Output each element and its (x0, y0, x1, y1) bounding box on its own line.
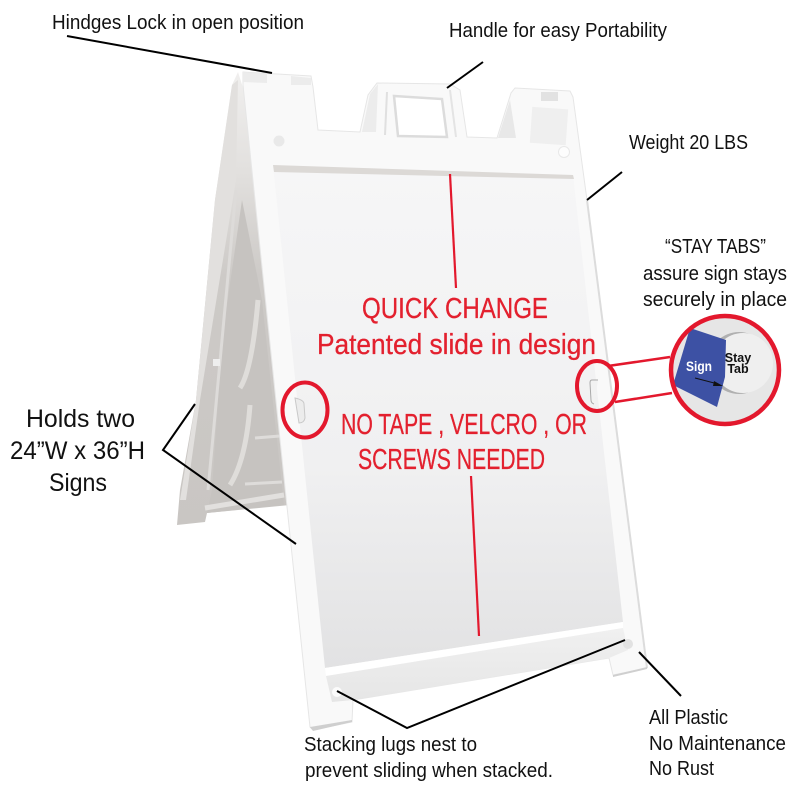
label: stacking lugs: Stacking lugs nest to (304, 734, 477, 756)
ring (671, 316, 779, 424)
label: material: All Plastic (649, 707, 728, 729)
right edge (587, 200, 647, 668)
connector lines to detail (608, 357, 672, 402)
label: weight: Weight 20 LBS (629, 132, 748, 154)
label: stay tabs (643, 236, 787, 311)
tab (723, 333, 773, 393)
red heading: SCREWS NEEDED (358, 444, 545, 476)
red heading: NO TAPE , VELCRO , OR (341, 409, 587, 441)
label: sign size: Signs (49, 469, 107, 497)
red heading (317, 293, 596, 476)
arrow (695, 378, 723, 386)
tab shadow (720, 332, 749, 394)
stay tab label: Tab (727, 362, 749, 376)
blue sign (673, 328, 726, 407)
feet (310, 667, 647, 731)
bottom slot highlight (325, 622, 623, 676)
left tab (295, 398, 305, 423)
sign stand: front board (243, 72, 647, 731)
label: material: No Maintenance (649, 733, 786, 755)
sign label: Sign (686, 358, 712, 374)
label: material: No Rust (649, 758, 714, 780)
molded text block (530, 107, 568, 145)
handle highlights (362, 84, 378, 132)
right tab (590, 380, 598, 404)
top hinge tabs (243, 72, 311, 85)
label: stay tabs: assure sign stays (643, 263, 787, 285)
lower rivets (332, 687, 342, 697)
label: sign size: Holds two (26, 405, 135, 433)
top slot shadow (273, 165, 574, 179)
red circle: right tab (577, 361, 617, 411)
red heading: QUICK CHANGE (362, 293, 548, 325)
label: sign size (10, 405, 145, 497)
label: handle: Handle for easy Portability (449, 20, 667, 42)
label: stacking lugs: prevent sliding when stacked. (305, 760, 553, 782)
label: material (649, 707, 786, 780)
black callout lines (67, 36, 681, 728)
stay tab detail circle (671, 316, 779, 424)
label: stay tabs: securely in place (643, 289, 787, 311)
label: stacking lugs (304, 734, 553, 782)
label: sign size: 24”W x 36”H (10, 437, 145, 465)
stay tab label: Stay (725, 351, 751, 365)
red circle: left tab (282, 382, 328, 438)
upper rivets (274, 136, 284, 146)
bottom bar (326, 628, 628, 702)
handle opening (394, 96, 447, 137)
sign stand: rear board (177, 72, 290, 525)
label: hinges: Hindges Lock in open position (52, 12, 304, 34)
sign slot panel (273, 165, 623, 668)
red heading: Patented slide in design (317, 329, 596, 361)
label: stay tabs: “STAY TABS” (665, 236, 766, 258)
red pointer lines (450, 174, 479, 636)
